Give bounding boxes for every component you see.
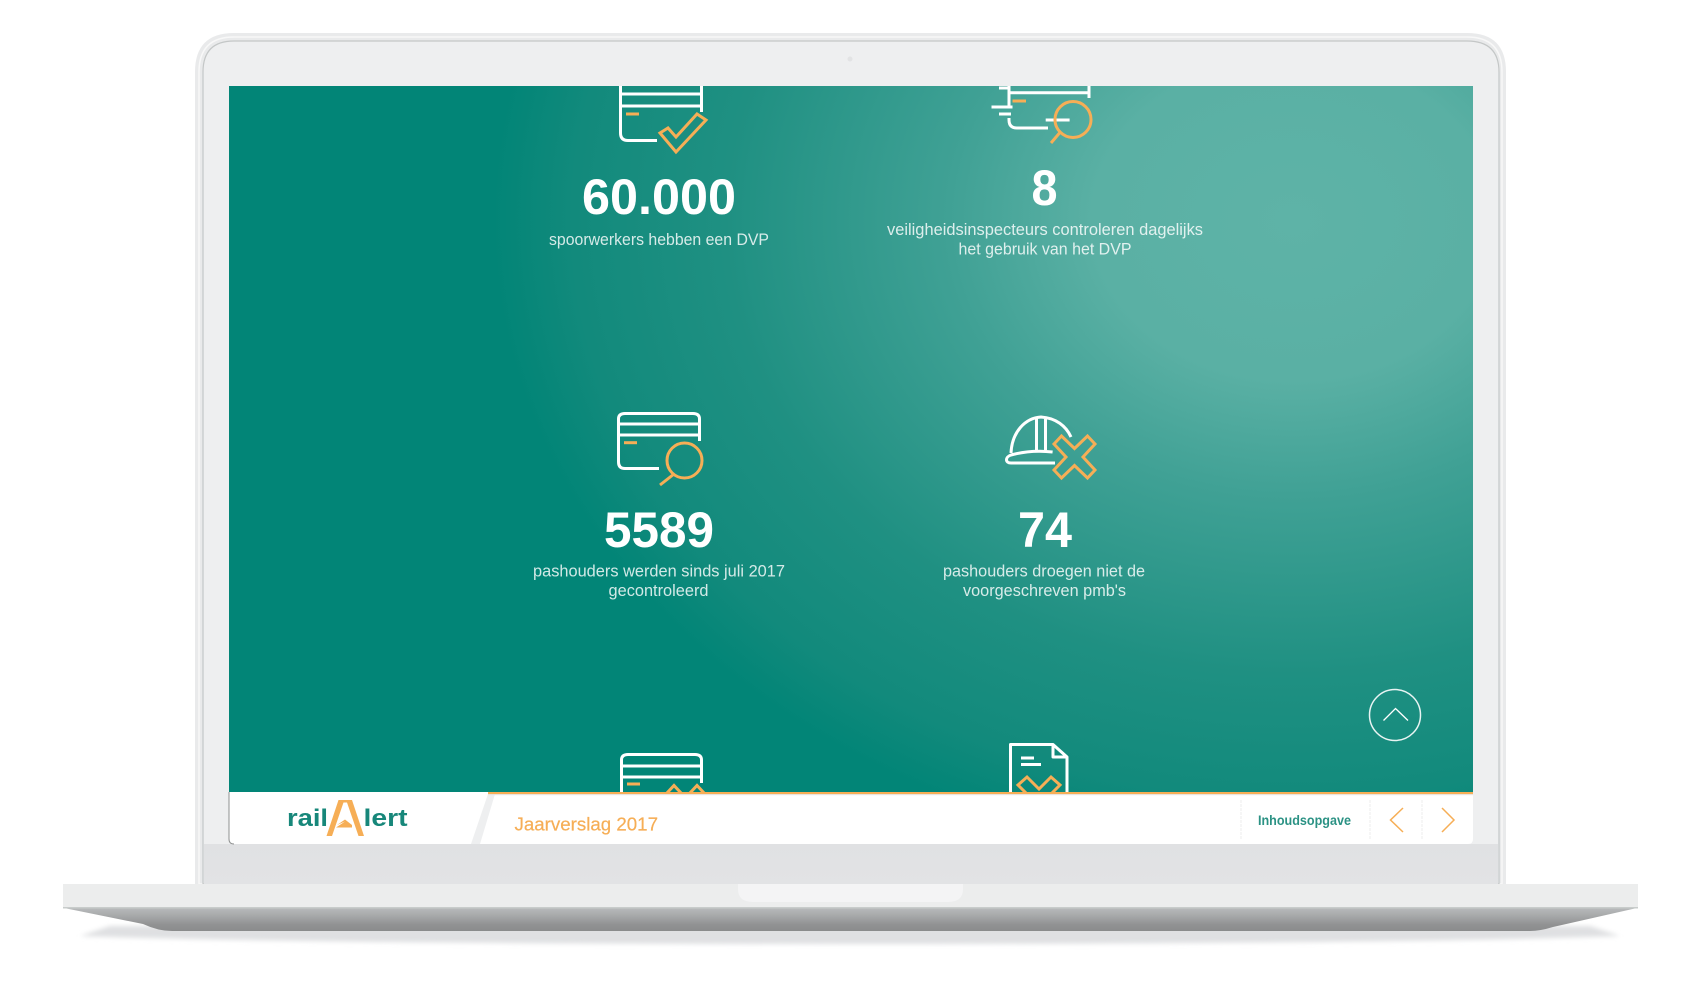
stat: 74 pashouders <box>943 417 1145 600</box>
description: pashouders werden sinds juli 2017 <box>533 563 785 581</box>
logo: rail <box>287 805 328 832</box>
arrow: next <box>1442 808 1454 832</box>
base shadow <box>80 926 1620 944</box>
description: spoorwerkers hebben een DVP <box>549 231 769 249</box>
number: 60.000 <box>582 169 736 225</box>
icon: card with check <box>620 80 706 152</box>
report title: Jaarverslag 2017 <box>514 814 658 834</box>
icon: partially visible document <box>1009 743 1068 792</box>
stat: 8 veiligheidsinspecteurs <box>887 80 1203 258</box>
laptop lid <box>195 33 1506 884</box>
number: 74 <box>1018 502 1072 558</box>
logo: lert <box>364 805 408 832</box>
stat: 74 pashouders: voorgeschreven pmb's <box>963 582 1126 600</box>
icon: card with magnifier <box>618 414 702 485</box>
stat: 8 veiligheidsinspecteurs: het gebruik van het DVP <box>958 240 1132 258</box>
icon: partially visible card <box>622 754 705 795</box>
icon: helmet with cross <box>1006 417 1095 478</box>
screen background <box>229 86 1473 792</box>
logo <box>287 800 408 836</box>
screen content <box>533 80 1420 806</box>
contents link: Inhoudsopgave <box>1258 813 1351 828</box>
icon: moving card with magnifier <box>992 80 1091 143</box>
description: veiligheidsinspecteurs controleren dagelijks <box>887 221 1203 239</box>
base underside <box>64 908 1637 931</box>
number: 8 <box>1032 160 1058 216</box>
description: pashouders droegen niet de <box>943 563 1145 581</box>
number: 5589 <box>604 502 714 558</box>
base top <box>63 884 1638 908</box>
footer bar <box>229 792 1473 844</box>
arrow: previous <box>1390 808 1403 832</box>
stat: 5589 pashouders <box>533 414 785 600</box>
stat: 60.000 spoorwerkers <box>549 80 769 249</box>
scroll up button <box>1370 690 1420 740</box>
stat: 5589 pashouders: gecontroleerd <box>608 582 708 600</box>
laptop base <box>63 884 1638 944</box>
base notch <box>738 884 963 902</box>
